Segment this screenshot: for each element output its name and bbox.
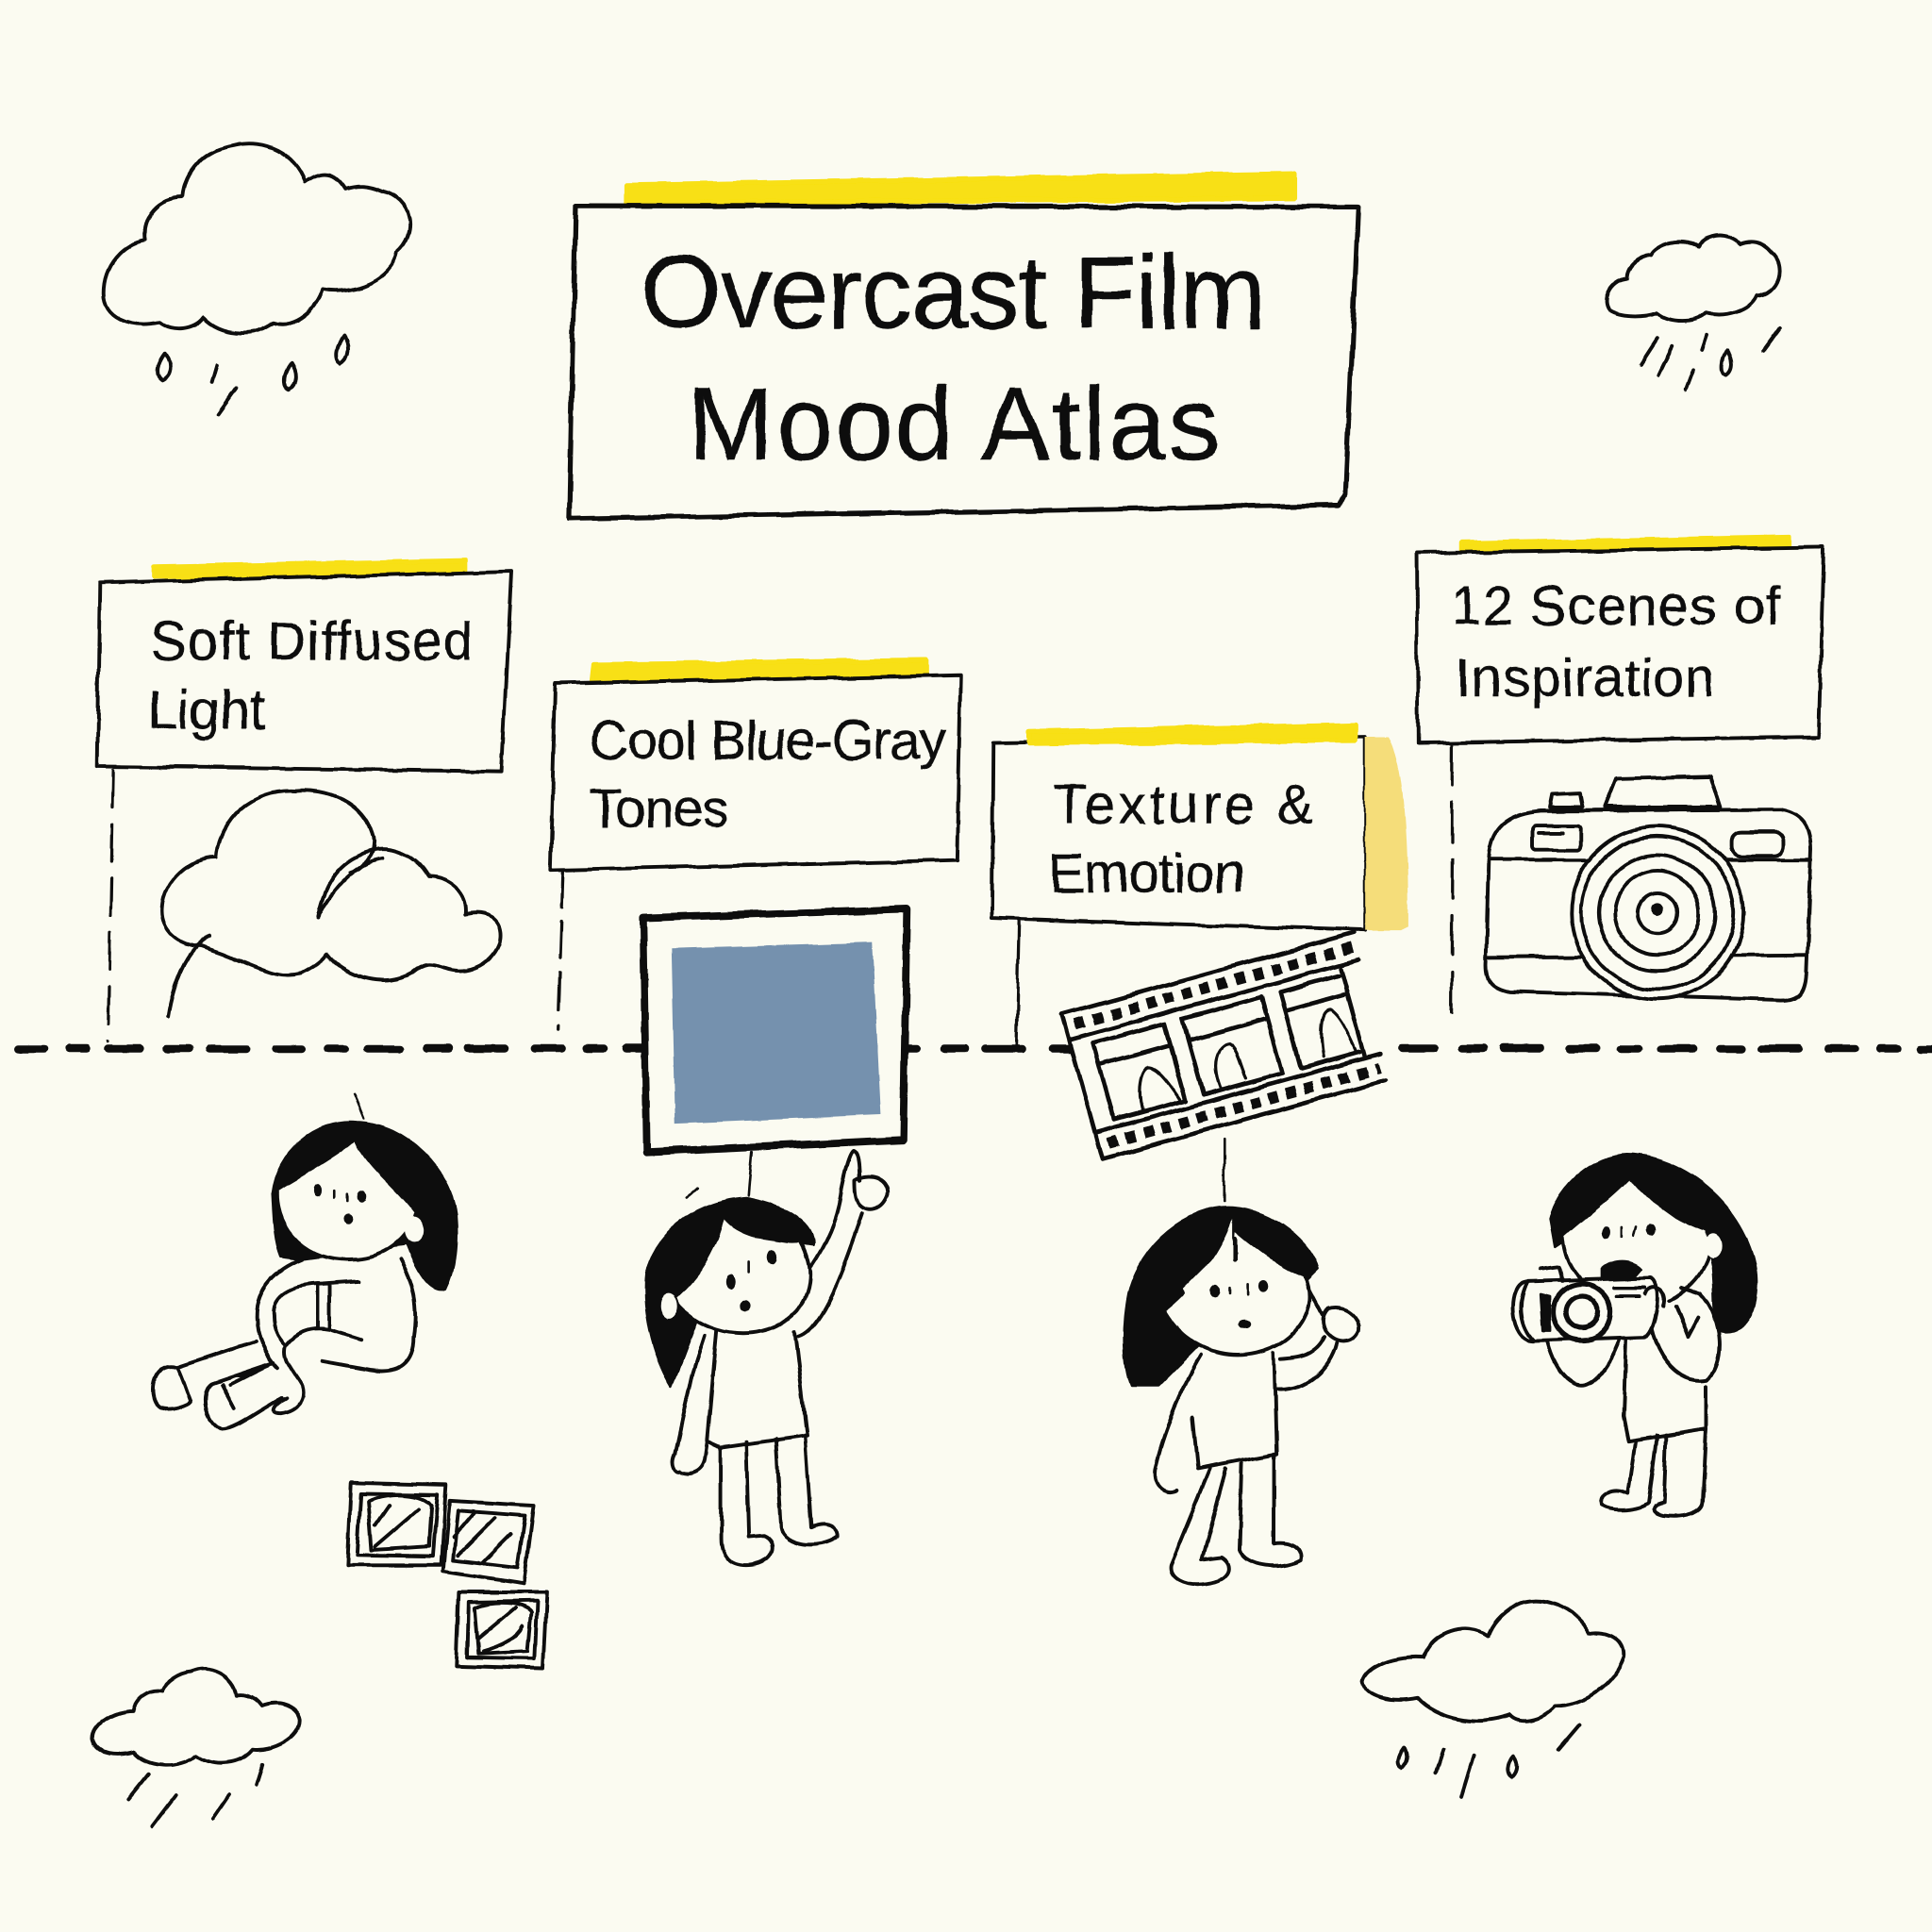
panel: 12 scenes of inspiration label: Inspiration <box>1456 648 1715 708</box>
panel: texture and emotion label <box>991 724 1408 930</box>
icon: rain cloud bottom left <box>92 1669 301 1826</box>
panel: soft diffused light label: Light <box>148 680 265 741</box>
icon: rain cloud bottom right <box>1363 1601 1624 1796</box>
panel: cool blue-gray tones label <box>551 660 961 870</box>
title panel: Overcast Film <box>641 235 1265 350</box>
icon: film strip <box>1062 932 1399 1158</box>
character: girl sitting <box>153 1123 457 1429</box>
icon: rain cloud top left <box>104 143 410 414</box>
panel: texture and emotion label: Emotion <box>1049 844 1244 905</box>
panel: cool blue-gray tones label: Cool Blue-Gray <box>589 711 946 772</box>
icon: large camera <box>1486 776 1811 1001</box>
panel: cool blue-gray tones label: Tones <box>589 778 729 839</box>
icon: blue-gray colour swatch <box>643 909 907 1152</box>
connector lines <box>108 745 1453 1201</box>
icon: rain cloud top right <box>1607 236 1780 390</box>
title panel: Mood Atlas <box>688 367 1220 482</box>
character: girl scratching head <box>1124 1208 1358 1584</box>
icon: small film frames <box>347 1482 547 1668</box>
divider: dashed horizontal line <box>17 1045 1932 1052</box>
panel: texture and emotion label: Texture & <box>1054 774 1313 835</box>
panel: soft diffused light label: Soft Diffused <box>150 611 474 672</box>
panel: soft diffused light label <box>97 560 511 772</box>
panel: 12 scenes of inspiration label: 12 Scenes of <box>1452 576 1781 637</box>
character: girl with camera <box>1513 1155 1757 1516</box>
character: girl pointing up <box>645 1151 888 1565</box>
panel: 12 scenes of inspiration label <box>1417 537 1824 743</box>
title panel <box>569 174 1357 519</box>
icon: soft cloud <box>161 791 501 1017</box>
